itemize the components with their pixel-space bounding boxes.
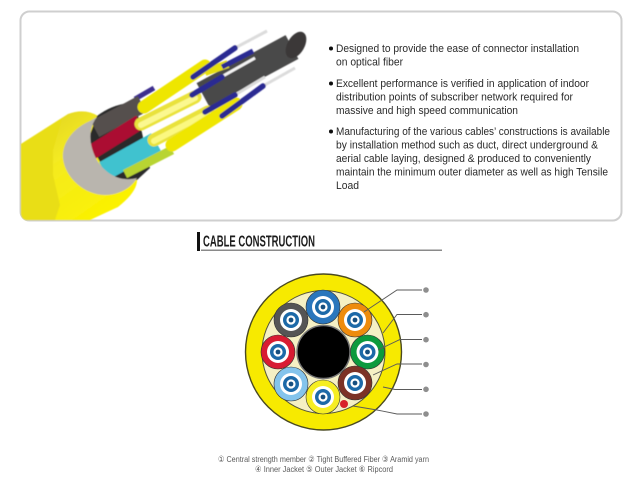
outer jacket bbox=[246, 274, 402, 430]
illustration: fiber optic cable cutaway bbox=[21, 28, 311, 220]
white fibers bbox=[235, 31, 267, 48]
panel: product overview bbox=[20, 12, 622, 220]
central strength member bbox=[203, 47, 292, 95]
bullet 2: Excellent performance is verified in application of indoor bbox=[336, 78, 589, 90]
tube: yellow bbox=[306, 380, 340, 414]
ripcord bbox=[340, 400, 348, 408]
bullet 3: Load bbox=[336, 180, 359, 192]
bullet 1: on optical fiber bbox=[336, 56, 403, 68]
central strength member bbox=[297, 326, 350, 378]
bullet 3: maintain the minimum outer diameter as well as high Tensile bbox=[336, 166, 608, 178]
leader lines and markers bbox=[353, 287, 429, 417]
bullet 3: Manufacturing of the various cables’ constructions is available bbox=[336, 126, 610, 138]
tube: grey bbox=[274, 303, 308, 337]
heading: cable construction: CABLE CONSTRUCTION bbox=[203, 234, 315, 250]
inner tubes bbox=[95, 104, 142, 129]
aramid yarn and inner jacket bbox=[262, 290, 385, 414]
tube: brown bbox=[338, 366, 372, 400]
tube: green bbox=[350, 335, 384, 369]
heading: cable construction bbox=[197, 232, 442, 251]
purple edge bbox=[135, 88, 154, 99]
feature list bbox=[329, 43, 610, 192]
tube: orange bbox=[338, 303, 372, 337]
bullet 2 bbox=[329, 78, 589, 117]
diagram: cable cross-section bbox=[246, 274, 429, 430]
bullet 3: by installation method such as duct, direct underground & bbox=[336, 140, 598, 152]
tube: blue bbox=[306, 290, 340, 324]
legend: ① Central strength member ② Tight Buffered Fiber ③ Aramid yarn bbox=[218, 454, 429, 464]
bullet 3 bbox=[329, 126, 610, 192]
yellow tight buffered tubes bbox=[144, 66, 205, 107]
aramid ring bbox=[63, 117, 137, 195]
legend: ④ Inner Jacket ⑤ Outer Jacket ⑥ Ripcord bbox=[255, 464, 393, 474]
bullet 2: distribution points of subscriber network required for bbox=[336, 92, 573, 104]
bullet 1: Designed to provide the ease of connector installation bbox=[336, 43, 579, 55]
bullet 3: aerial cable laying, designed & produced to conveniently bbox=[336, 153, 592, 165]
blue fibers bbox=[193, 48, 235, 77]
opening bbox=[88, 102, 150, 180]
bullet 2: massive and high speed communication bbox=[336, 105, 518, 117]
tube: light blue bbox=[274, 367, 308, 401]
slit bbox=[223, 58, 255, 76]
legend bbox=[218, 454, 429, 474]
bullet 1 bbox=[329, 43, 579, 68]
tube: red bbox=[261, 335, 295, 369]
